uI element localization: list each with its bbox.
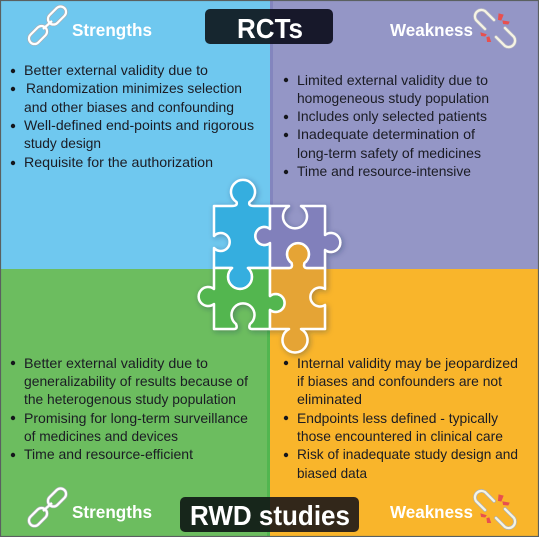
puzzle piece: blue (214, 180, 270, 289)
heading: Weakness: Weakness (390, 502, 473, 522)
list: RWD weakness: eliminated (297, 391, 362, 407)
list: RCT strengths: Well-defined end-points and rigorous (24, 117, 254, 133)
heading: Weakness: Weakness (390, 20, 473, 40)
panel: RCT weakness (270, 0, 539, 269)
list: RWD strengths: Better external validity due to (24, 355, 208, 371)
panel: RWD weakness (270, 269, 539, 537)
puzzle piece: green (199, 268, 285, 329)
list: RCT weakness: Includes only selected patients (297, 108, 487, 124)
list: RWD weakness: Risk of inadequate study design and (297, 446, 518, 462)
icon: broken chain (475, 10, 515, 47)
puzzle piece: orange (270, 243, 325, 352)
list: RCT weakness (284, 72, 489, 179)
list: RWD strengths: of medicines and devices (24, 428, 178, 444)
list: RWD weakness: if biases and confounders are not (297, 373, 502, 389)
list: RWD strengths: generalizability of results because of (24, 373, 248, 389)
list: RWD weakness: those encountered in clinical care (297, 428, 503, 444)
list: RCT strengths: Randomization minimizes selection (26, 80, 242, 96)
title: RCTs (205, 9, 333, 44)
list: RWD strengths: Time and resource-efficient (24, 446, 193, 462)
list: RWD weakness: Endpoints less defined - typically (297, 410, 498, 426)
list: RCT weakness: Time and resource-intensive (297, 163, 471, 179)
icon: broken chain (475, 491, 515, 528)
panel: RWD strengths (0, 269, 270, 537)
heading: Strengths: Strengths (72, 502, 152, 522)
list: RCT strengths: Better external validity due to (24, 62, 208, 78)
list: RCT strengths: and other biases and confounding (24, 99, 234, 115)
list: RCT strengths: study design (24, 135, 101, 151)
list: RWD strengths (11, 355, 248, 462)
heading: Strengths: Strengths (72, 20, 152, 40)
list: RCT weakness: long-term safety of medicines (297, 145, 481, 161)
list: RCT weakness: homogeneous study population (297, 90, 489, 106)
panel: RCT strengths (0, 0, 270, 269)
icon: chain (27, 486, 68, 528)
title: RWD studies: RWD studies (190, 500, 350, 531)
list: RCT strengths (11, 62, 254, 170)
list: RWD weakness: Internal validity may be jeopardized (297, 355, 518, 371)
list: RCT weakness: Limited external validity due to (297, 72, 488, 88)
list: RCT strengths: Requisite for the authorization (24, 154, 213, 170)
list: RWD weakness (284, 355, 518, 481)
icon: chain (27, 4, 68, 46)
list: RCT weakness: Inadequate determination of (297, 126, 475, 142)
list: RWD strengths: Promising for long-term surveillance (24, 410, 248, 426)
puzzle piece: purple (255, 206, 340, 268)
list: RWD strengths: the heterogenous study population (24, 391, 236, 407)
puzzle graphic (199, 180, 340, 352)
list: RWD weakness: biased data (297, 465, 367, 481)
title: RCTs: RCTs (237, 13, 303, 44)
